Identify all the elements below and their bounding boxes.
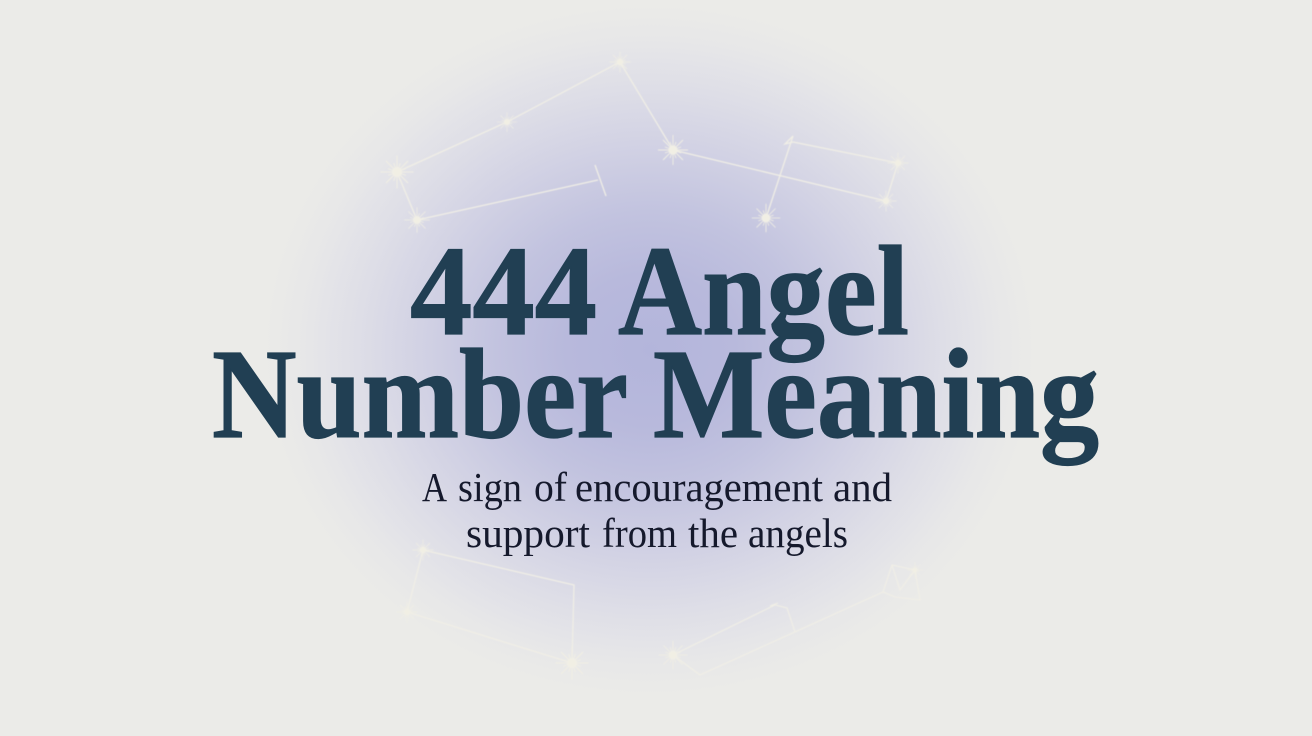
constellation: lower left xyxy=(396,540,588,680)
subtitle: the xyxy=(688,510,738,556)
constellation: upper left xyxy=(380,52,673,233)
title: Angel xyxy=(618,220,909,362)
lavender glow xyxy=(265,0,1035,736)
subtitle: and xyxy=(833,464,892,510)
title: Number xyxy=(212,323,628,465)
title: Meaning xyxy=(653,323,1099,465)
subtitle xyxy=(422,464,892,556)
subtitle: support xyxy=(466,510,591,556)
subtitle: sign xyxy=(458,464,522,510)
subtitle: angels xyxy=(748,510,848,556)
constellation: upper right xyxy=(658,135,908,232)
subtitle: from xyxy=(602,510,677,556)
constellation: lower right xyxy=(659,562,923,675)
subtitle: A xyxy=(422,464,447,510)
title: 444 xyxy=(410,220,597,362)
subtitle: encouragement xyxy=(575,464,824,510)
subtitle: of xyxy=(534,464,567,510)
title xyxy=(212,220,1099,465)
